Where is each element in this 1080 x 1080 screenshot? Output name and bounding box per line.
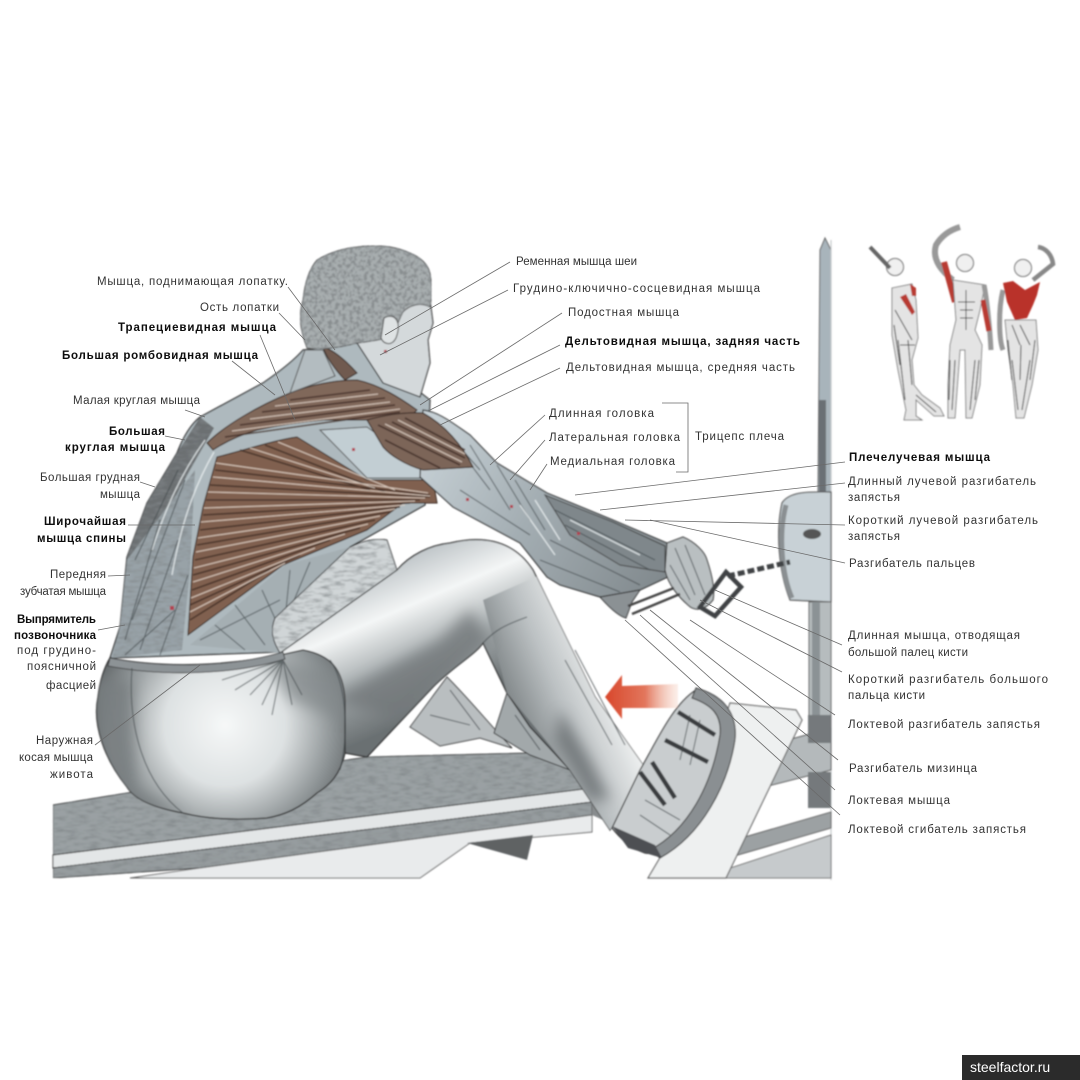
label: triceps heads with bracket: Медиальная головка (550, 456, 676, 468)
label: flexor carpi ulnaris: Локтевой сгибатель запястья (848, 824, 1026, 836)
label: abductor pollicis longus (715, 590, 1020, 659)
label: triceps heads with bracket: Латеральная головка (549, 432, 681, 444)
label: extensor carpi ulnaris: Локтевой разгибатель запястья (848, 719, 1040, 731)
label: trapezius: Трапециевидная мышца (118, 322, 277, 334)
label: pectoralis major: мышца (100, 489, 141, 501)
label: teres major: Большая (109, 426, 165, 438)
label: trapezius (118, 322, 295, 420)
label: pectoralis major (40, 472, 155, 501)
hand, handle and chain (600, 537, 790, 618)
label: brachioradialis: Плечелучевая мышца (849, 452, 991, 464)
label: external oblique: живота (50, 769, 94, 781)
label: serratus anterior (20, 569, 130, 598)
hip lobe above the thigh (272, 539, 397, 653)
label: erector spinae: под грудино- (17, 645, 96, 657)
label: erector spinae (14, 614, 125, 692)
label: teres minor: Малая круглая мышца (73, 395, 201, 407)
figure 3: back view (1000, 247, 1053, 418)
figure 2: front view (935, 227, 991, 418)
figure 1: side view (870, 247, 944, 420)
label: deltoid middle (440, 362, 795, 425)
label: erector spinae: позвоночника (14, 630, 97, 642)
main illustration: seated cable row (53, 238, 831, 880)
label: scapular spine: Ость лопатки (200, 302, 279, 314)
label: erector spinae: фасцией (46, 680, 96, 692)
machine frame and cable post (700, 238, 831, 880)
label: external oblique: косая мышца (19, 752, 94, 764)
pelvis and shorts (90, 650, 345, 819)
label: flexor carpi ulnaris (625, 620, 1026, 836)
label: abductor pollicis longus: Длинная мышца, отводящая (848, 630, 1020, 642)
label: extensor digitorum (650, 520, 975, 570)
label: extensor pollicis brevis: пальца кисти (848, 690, 925, 702)
label: anconeus: Локтевая мышца (848, 795, 951, 807)
small figures with highlighted muscles (870, 227, 1053, 420)
label: deltoid middle: Дельтовидная мышца, средняя часть (566, 362, 795, 374)
label: triceps heads with bracket: Трицепс плеча (695, 431, 785, 443)
label: sternocleidomastoid: Грудино-ключично-сосцевидная мышца (513, 283, 761, 295)
red direction arrow (605, 675, 678, 719)
arm: triceps and forearm (420, 410, 672, 597)
label: triceps heads with bracket (490, 403, 785, 490)
label: teres major (65, 426, 185, 454)
label: serratus anterior: зубчатая мышца (20, 586, 107, 598)
ear (381, 316, 398, 344)
infraspinatus light area (320, 427, 423, 478)
label: latissimus dorsi: мышца спины (37, 533, 126, 545)
label: sternocleidomastoid (380, 283, 761, 355)
label: erector spinae: поясничной (27, 661, 96, 673)
label: extensor pollicis brevis (700, 600, 1048, 702)
label: extensor pollicis brevis: Короткий разгибатель большого (848, 674, 1048, 686)
torso (110, 343, 430, 658)
label: splenius (385, 256, 637, 335)
label: teres major: круглая мышца (65, 442, 166, 454)
label: scapular spine (200, 302, 305, 340)
label: levator scapulae: Мышца, поднимающая лопатку. (97, 276, 288, 288)
label: abductor pollicis longus: большой палец кисти (848, 647, 968, 659)
label: triceps heads with bracket: Длинная головка (549, 408, 655, 420)
label: extensor digitorum: Разгибатель пальцев (849, 558, 975, 570)
label: deltoid posterior (430, 336, 800, 410)
label: brachioradialis (575, 452, 991, 495)
label: rhomboid major: Большая ромбовидная мышца (62, 350, 259, 362)
label: external oblique (19, 665, 200, 781)
latissimus dorsi (188, 437, 437, 635)
label: rhomboid major (62, 350, 275, 395)
label: extensor carpi radialis longus: запястья (848, 492, 900, 504)
foot plate (648, 703, 802, 878)
label: deltoid posterior: Дельтовидная мышца, задняя часть (565, 336, 800, 348)
hair (300, 246, 432, 349)
label: levator scapulae (97, 276, 335, 350)
near leg: thigh and shin (280, 540, 650, 830)
sandal and foot (612, 688, 735, 858)
head: face (357, 300, 433, 397)
label: extensor digiti minimi (650, 610, 978, 775)
label: splenius: Ременная мышца шеи (516, 256, 637, 268)
label: latissimus dorsi (37, 516, 195, 545)
label: extensor carpi radialis longus (600, 476, 1036, 510)
label: infraspinatus (420, 307, 680, 405)
label: teres minor (73, 395, 205, 417)
far leg (410, 677, 570, 770)
watermark (962, 1055, 1080, 1080)
label: anconeus (640, 615, 951, 807)
rear deltoid (367, 413, 473, 470)
label: extensor carpi radialis longus: Длинный лучевой разгибатель (848, 476, 1036, 488)
label: latissimus dorsi: Широчайшая (44, 516, 126, 528)
bench (53, 752, 625, 878)
watermark: steelfactor.ru (970, 1059, 1050, 1075)
label: extensor carpi radialis brevis: запястья (848, 531, 900, 543)
small red muscle markers (170, 350, 580, 610)
label: extensor carpi radialis brevis: Короткий лучевой разгибатель (848, 515, 1038, 527)
trapezius band (207, 347, 417, 450)
label: extensor digiti minimi: Разгибатель мизинца (849, 763, 978, 775)
label: external oblique: Наружная (36, 735, 93, 747)
label: extensor carpi ulnaris (690, 620, 1040, 731)
label: extensor carpi radialis brevis (625, 515, 1038, 543)
label: infraspinatus: Подостная мышца (568, 307, 680, 319)
label: pectoralis major: Большая грудная (40, 472, 140, 484)
label: erector spinae: Выпрямитель (17, 614, 96, 626)
muscle labels and leader lines (14, 256, 1048, 836)
back edge muscles and erector shading (112, 417, 350, 658)
label: serratus anterior: Передняя (50, 569, 106, 581)
